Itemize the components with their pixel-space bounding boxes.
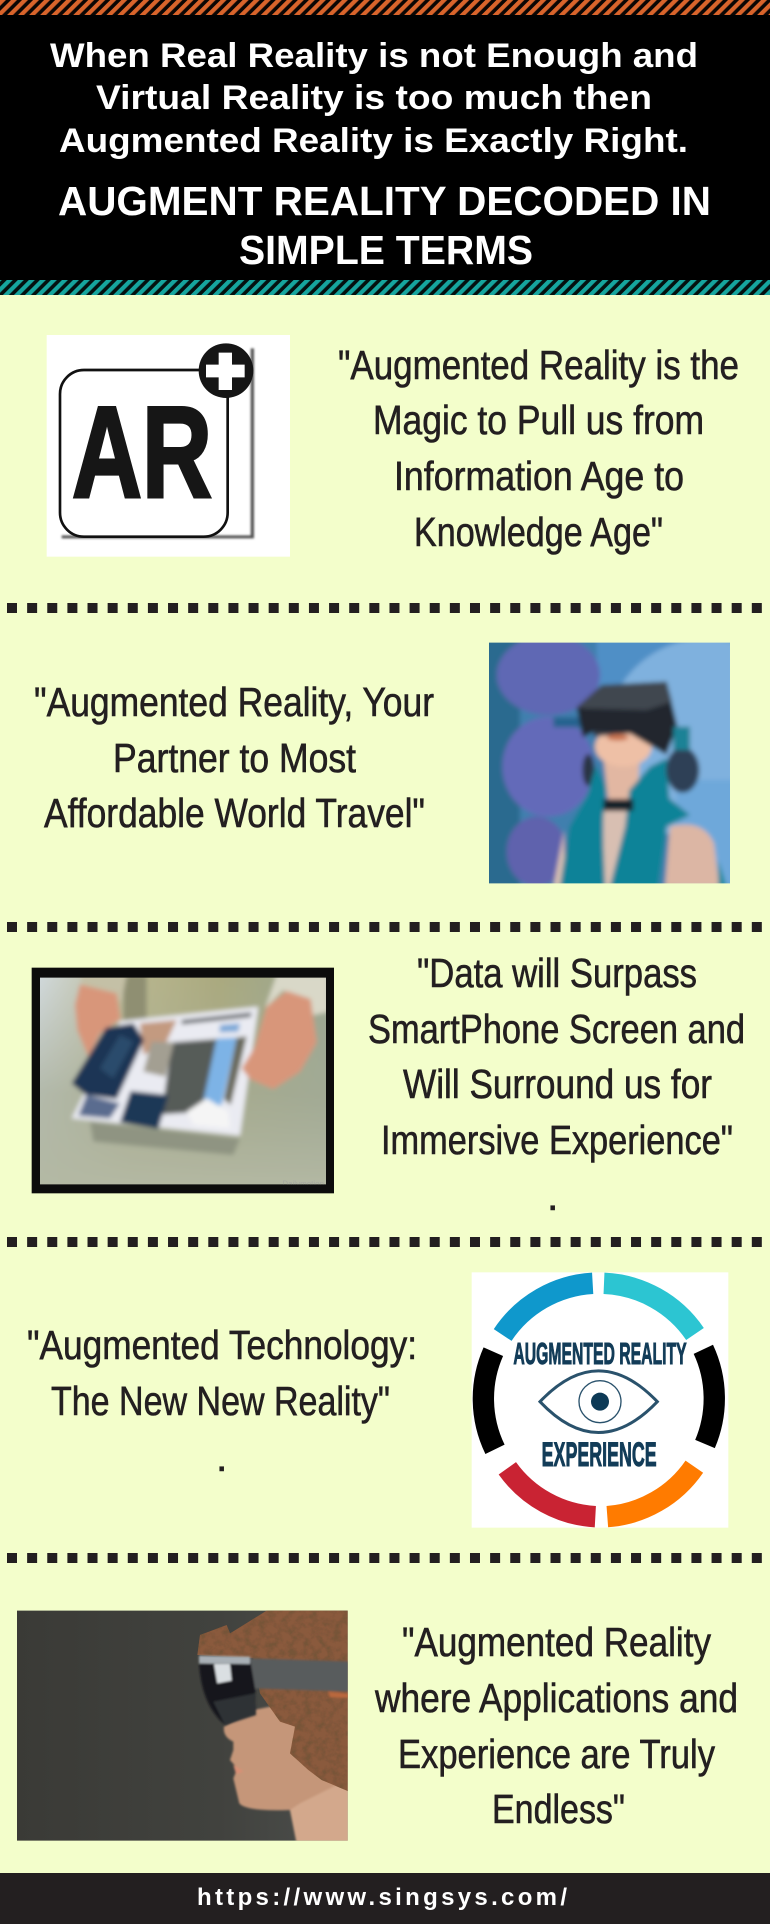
header banner xyxy=(0,0,770,295)
quote text xyxy=(27,1322,417,1480)
quote text: The New New Reality" xyxy=(51,1378,390,1424)
panel: immersive experience quote xyxy=(32,950,745,1219)
teal striped band xyxy=(0,280,770,295)
headline quote xyxy=(50,37,698,160)
quote text: Knowledge Age" xyxy=(414,509,663,555)
quote text: Partner to Most xyxy=(113,735,357,781)
quote text: Endless" xyxy=(492,1786,625,1832)
footer xyxy=(0,1873,770,1924)
quote text: Information Age to xyxy=(394,453,684,499)
quote text: "Data will Surpass xyxy=(417,950,697,996)
quote text: Affordable World Travel" xyxy=(44,790,425,836)
icon: augmented reality experience badge: EXPERIENCE xyxy=(542,1436,657,1474)
quote text: "Augmented Reality, Your xyxy=(34,679,434,725)
icon: augmented reality experience badge xyxy=(472,1272,728,1528)
orange striped band xyxy=(0,0,770,15)
headline quote: When Real Reality is not Enough and xyxy=(50,37,698,75)
icon: AR plus logo xyxy=(47,335,290,557)
quote text: . xyxy=(547,1173,558,1219)
woman xyxy=(582,754,594,786)
title xyxy=(58,178,711,273)
quote text xyxy=(34,679,434,836)
quote text: . xyxy=(216,1434,227,1480)
headline quote: Augmented Reality is Exactly Right. xyxy=(59,122,688,160)
title: AUGMENT REALITY DECODED IN xyxy=(58,178,711,224)
panel: endless applications quote xyxy=(10,1603,738,1850)
headline quote: Virtual Reality is too much then xyxy=(96,79,652,117)
quote text: Experience are Truly xyxy=(398,1731,715,1777)
panel: new new reality quote xyxy=(27,1272,728,1528)
quote text: Will Surround us for xyxy=(403,1061,712,1107)
black header panel xyxy=(0,15,770,280)
quote text: Magic to Pull us from xyxy=(373,397,704,443)
quote text xyxy=(338,342,739,555)
photo: IKEA augmented reality catalogue: Dailymotion xyxy=(282,1180,324,1189)
quote text xyxy=(374,1619,738,1832)
title: SIMPLE TERMS xyxy=(239,227,533,273)
quote text: "Augmented Technology: xyxy=(27,1322,417,1368)
photo: profile of person wearing AR visor xyxy=(17,1610,348,1841)
quote text xyxy=(368,950,745,1219)
icon: AR plus logo: AR xyxy=(72,379,212,525)
photo: IKEA augmented reality catalogue xyxy=(32,968,334,1193)
panel: world travel quote xyxy=(35,642,730,884)
website URL: https://www.singsys.com/ xyxy=(197,1884,567,1911)
panel: information age quote xyxy=(47,335,739,557)
quote text: "Augmented Reality xyxy=(402,1619,711,1665)
photo: woman wearing VR headset xyxy=(489,642,730,884)
